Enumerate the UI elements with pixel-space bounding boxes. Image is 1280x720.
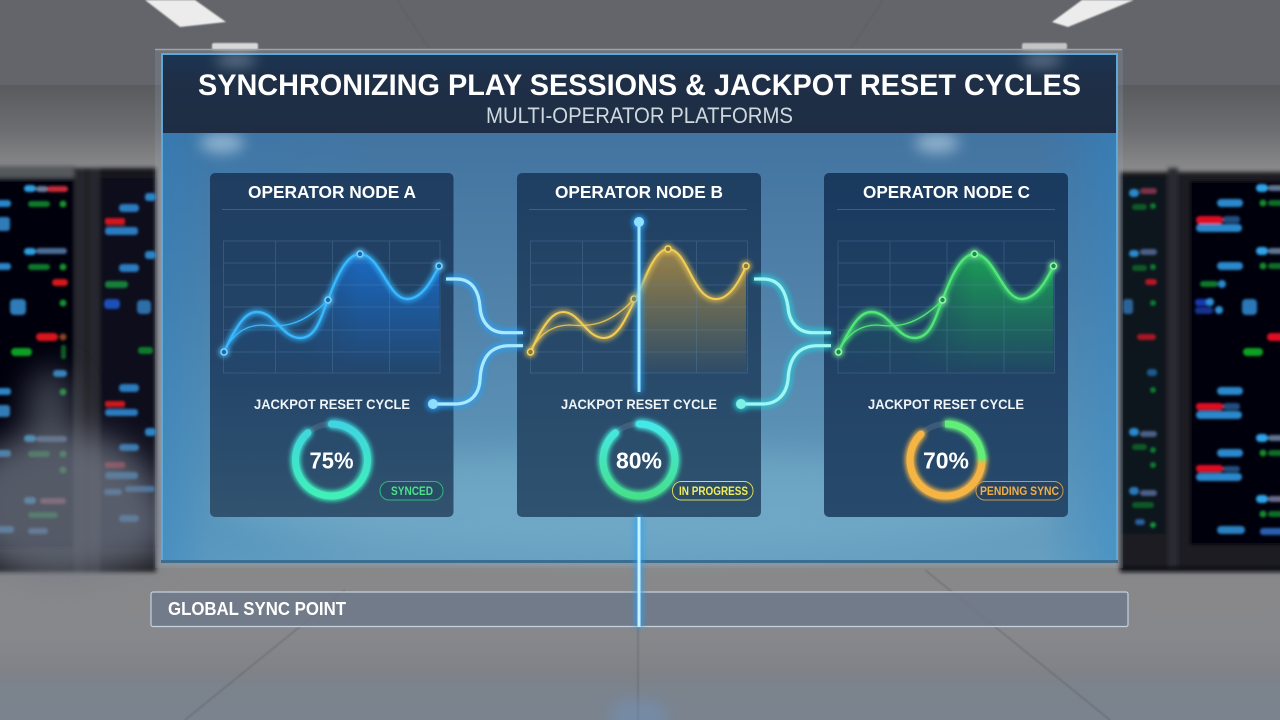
heading: node C: OPERATOR NODE C <box>863 182 1030 202</box>
progress ring: 75%: 75% <box>310 448 354 474</box>
status badge: in progress <box>672 482 753 500</box>
progress ring: 80%: 80% <box>616 448 662 474</box>
heading: node B: OPERATOR NODE B <box>555 182 723 202</box>
progress ring: 80% <box>603 424 675 496</box>
label: jackpot reset cycle A: JACKPOT RESET CYCLE <box>254 396 410 412</box>
panel: operator node A <box>210 173 454 517</box>
chart: node A <box>221 241 442 373</box>
label: jackpot reset cycle C: JACKPOT RESET CYCLE <box>868 396 1024 412</box>
fog <box>0 368 170 580</box>
main glass panel <box>155 49 1123 568</box>
header band <box>163 53 1116 133</box>
progress ring: 75% <box>295 424 368 496</box>
heading: node A: OPERATOR NODE A <box>248 182 416 202</box>
status badge: in progress: IN PROGRESS <box>679 486 748 498</box>
panel: operator node C <box>824 173 1068 517</box>
server rack left <box>0 166 156 572</box>
label: jackpot reset cycle B: JACKPOT RESET CYCLE <box>561 396 717 412</box>
connector arrows: A to B <box>428 279 523 409</box>
server rack right <box>1120 168 1280 572</box>
subtitle: MULTI-OPERATOR PLATFORMS <box>486 103 793 128</box>
progress ring: 70% <box>910 424 982 496</box>
connector arrows: B to C <box>736 279 831 409</box>
chart: node C <box>836 241 1056 373</box>
status badge: synced <box>380 482 443 500</box>
panel: operator node B <box>517 173 761 517</box>
status badge: pending sync <box>976 482 1063 500</box>
global sync bar <box>151 592 1128 626</box>
title: SYNCHRONIZING PLAY SESSIONS & JACKPOT RESET CYCLES <box>198 69 1081 102</box>
status badge: pending sync: PENDING SYNC <box>980 486 1059 498</box>
chart: node B <box>528 241 749 373</box>
progress ring: 70%: 70% <box>923 448 969 474</box>
status badge: synced: SYNCED <box>391 486 433 498</box>
label: global sync point: GLOBAL SYNC POINT <box>168 599 346 619</box>
global sync vertical line <box>634 217 644 627</box>
